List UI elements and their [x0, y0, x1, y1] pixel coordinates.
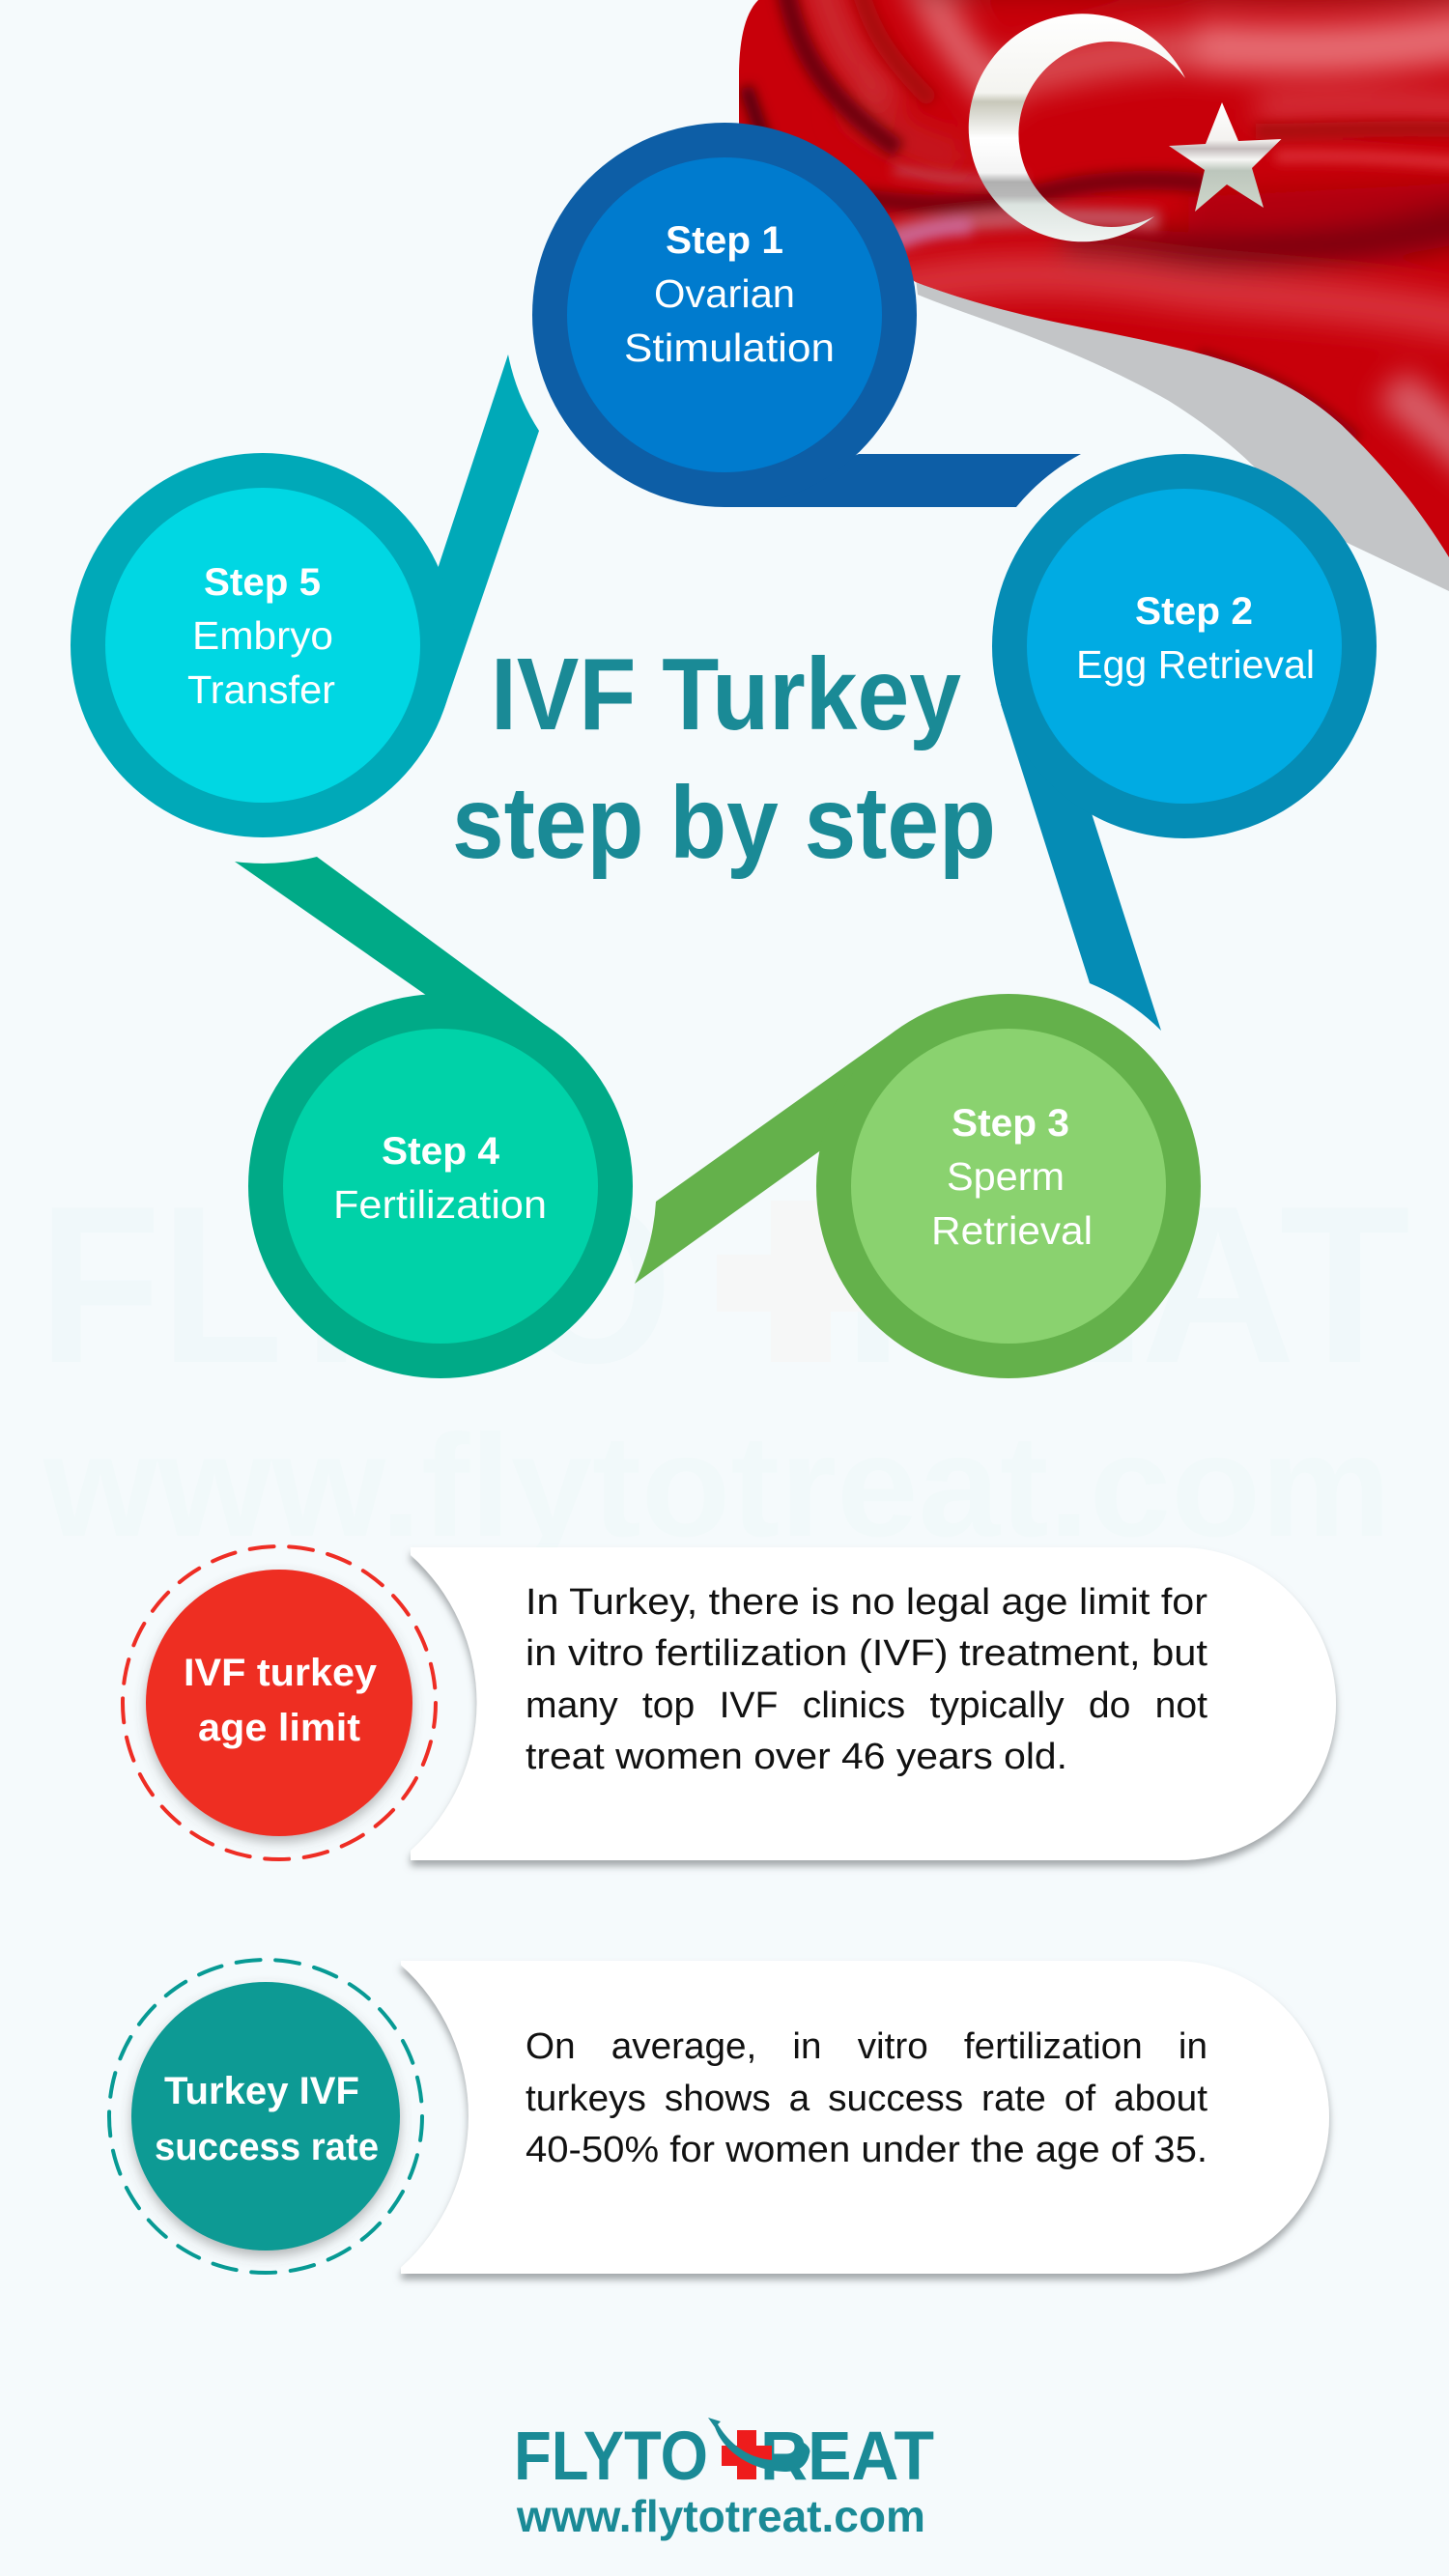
step 3 label: Retrieval: [931, 1208, 1093, 1253]
Turkish flag: [734, 0, 1449, 591]
step 1 tail and ring: [532, 123, 1081, 507]
step 5 label: Step 5: [204, 561, 321, 604]
age limit text: many top IVF clinics typically do not: [526, 1685, 1208, 1726]
age limit card: [411, 1547, 1336, 1860]
watermark: FLYTO: [39, 1160, 672, 1410]
age limit badge: [146, 1570, 412, 1836]
logo wordmark: REAT: [760, 2419, 934, 2495]
success rate dashed ring: [109, 1960, 422, 2273]
step 5 label: Transfer: [187, 667, 335, 712]
age limit text: In Turkey, there is no legal age limit for: [526, 1582, 1208, 1623]
step 1 label: [624, 219, 835, 370]
title: IVF Turkey: [491, 637, 961, 751]
step 2 label: [1076, 590, 1315, 687]
step 2 label: Egg Retrieval: [1076, 642, 1315, 687]
age limit text: [526, 1582, 1208, 1777]
success rate badge: success rate: [155, 2126, 379, 2168]
flag cloth: [734, 0, 1449, 580]
watermark: [39, 1160, 1410, 1567]
icon: medical cross: [722, 2430, 772, 2479]
step 1 label: Stimulation: [624, 326, 835, 370]
flag shadow fold: [916, 278, 1449, 591]
panel: success rate: [109, 1960, 1329, 2274]
age limit badge: IVF turkey: [184, 1652, 378, 1694]
step 2 tail and ring: [992, 454, 1377, 1031]
step 3 label: Sperm: [947, 1154, 1065, 1199]
step 4: [235, 857, 633, 1378]
step 1: [532, 123, 1081, 507]
title: step by step: [452, 766, 996, 880]
icon: swoosh arrow: [708, 2418, 810, 2472]
step 4 label: [333, 1130, 547, 1227]
step 2 label: Step 2: [1135, 590, 1253, 633]
step 5 label: [187, 561, 335, 712]
success rate text: On average, in vitro fertilization in: [526, 2026, 1208, 2067]
step 5: [71, 354, 539, 837]
age limit text: treat women over 46 years old.: [526, 1737, 1067, 1777]
success rate text: turkeys shows a success rate of about: [526, 2079, 1208, 2119]
step 5 tail and ring: [71, 354, 539, 837]
step 4 label: Fertilization: [333, 1182, 547, 1227]
success rate badge: [131, 1982, 400, 2250]
step 4 label: Step 4: [382, 1130, 500, 1173]
star: [1169, 102, 1281, 212]
logo wordmark: [514, 2419, 934, 2495]
logo wordmark: FLYTO: [514, 2419, 708, 2495]
watermark: REAT: [843, 1160, 1410, 1410]
title: [452, 637, 996, 880]
step 3: [635, 994, 1201, 1378]
step 1 label: Step 1: [666, 219, 783, 262]
panel: age limit: [123, 1546, 1336, 1860]
age limit text: in vitro fertilization (IVF) treatment, but: [526, 1633, 1208, 1674]
step 4 tail and ring: [235, 857, 633, 1378]
step 1 label: Ovarian: [654, 271, 795, 316]
step 2: [992, 454, 1377, 1031]
logo url: www.flytotreat.com: [516, 2491, 925, 2541]
age limit badge: age limit: [198, 1707, 360, 1749]
success rate text: [526, 2026, 1208, 2170]
logo: [514, 2418, 934, 2541]
step 5 label: Embryo: [192, 613, 333, 658]
success rate card: [401, 1961, 1329, 2274]
crescent: [969, 14, 1185, 241]
success rate text: 40-50% for women under the age of 35.: [526, 2130, 1208, 2170]
success rate badge: Turkey IVF: [164, 2070, 359, 2112]
watermark: www.flytotreat.com: [43, 1404, 1391, 1567]
step 3 label: [931, 1102, 1093, 1253]
step 3 tail and ring: [635, 994, 1201, 1378]
step 3 label: Step 3: [952, 1102, 1069, 1145]
age limit dashed ring: [123, 1546, 436, 1859]
